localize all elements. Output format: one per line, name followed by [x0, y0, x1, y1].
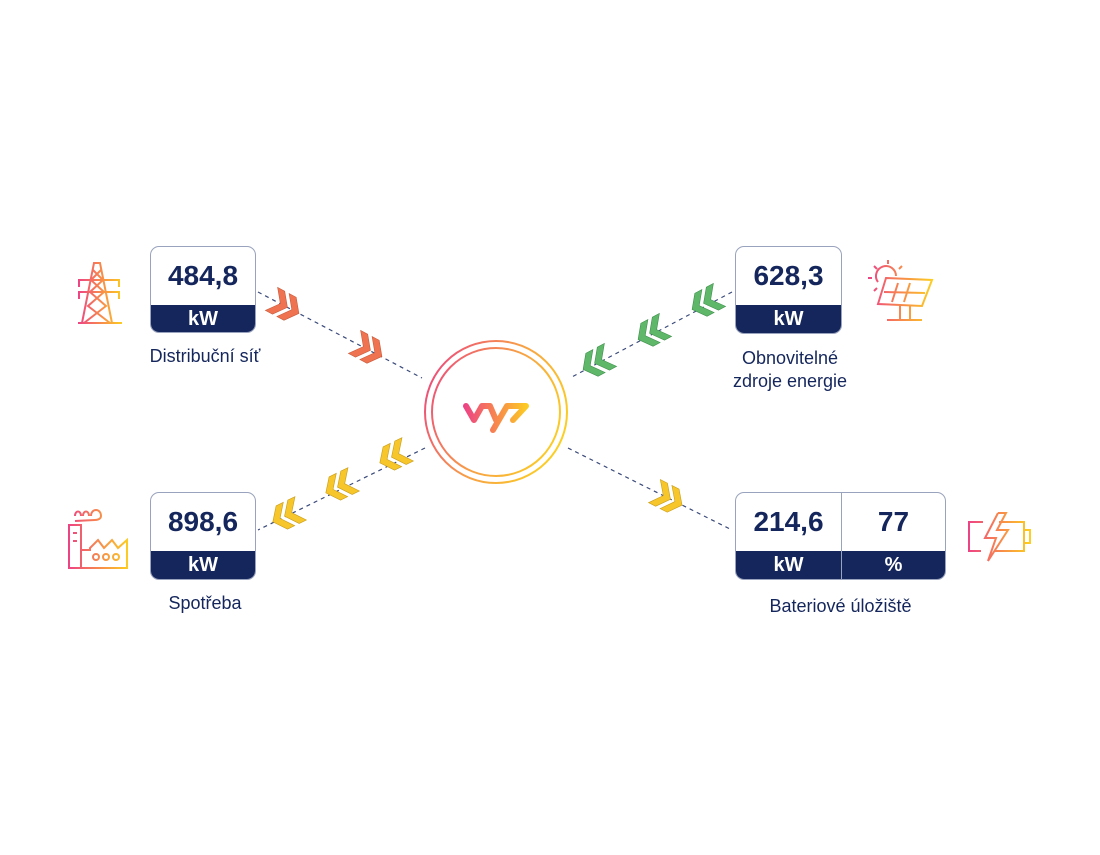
panel: renewables: 628,3	[753, 260, 824, 291]
panel: battery storage: kW	[774, 554, 804, 576]
arrows: center to consumption (yellow)	[267, 438, 413, 534]
arrow: center to battery (yellow)	[649, 480, 688, 517]
panel: renewables	[735, 246, 842, 334]
central circle with logo	[425, 341, 567, 483]
panel: battery storage: %	[885, 554, 902, 576]
label: distribution grid: Distribuční síť	[150, 346, 260, 366]
panel: consumption: kW	[188, 554, 218, 576]
panel: renewables: kW	[774, 308, 804, 330]
icon: power pylon	[78, 263, 122, 323]
label: consumption: Spotřeba	[168, 593, 242, 613]
panel: distribution grid	[150, 246, 256, 333]
panel: consumption: 898,6	[168, 506, 238, 537]
label: renewables: zdroje energie	[733, 371, 847, 391]
arrows: renewables to center (green)	[577, 283, 726, 381]
label: renewables: Obnovitelné	[742, 348, 838, 368]
panel: distribution grid: kW	[188, 308, 218, 330]
panel: battery storage: 77	[878, 506, 909, 537]
panel: distribution grid: 484,8	[168, 260, 238, 291]
icon: factory	[69, 510, 127, 568]
connector lines	[258, 292, 732, 530]
label: renewables	[733, 348, 847, 391]
panel: battery storage: 214,6	[753, 506, 824, 537]
icon: solar panel	[868, 260, 932, 320]
label: battery storage: Bateriové úložiště	[769, 596, 912, 616]
panel: battery storage	[735, 492, 946, 580]
icon: battery	[969, 513, 1030, 561]
arrows: grid to center (orange)	[265, 287, 388, 368]
logo	[466, 406, 526, 430]
panel: consumption	[150, 492, 256, 580]
